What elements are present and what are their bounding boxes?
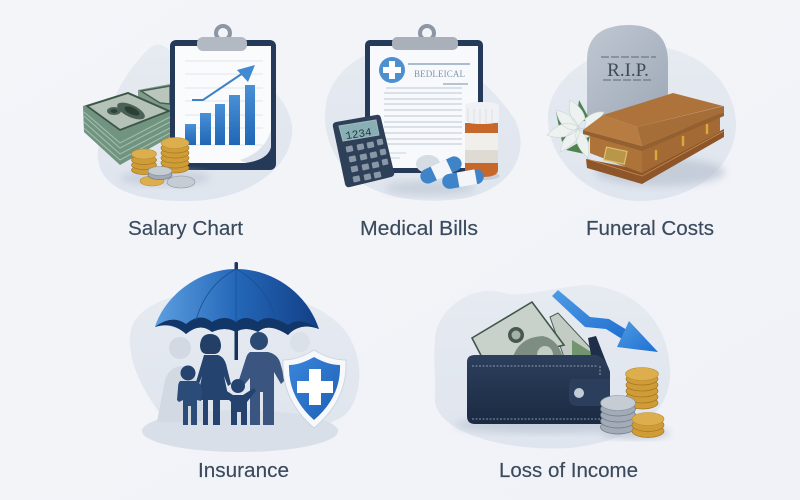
toddler centre	[220, 379, 256, 425]
icon: falling arrow	[552, 290, 658, 352]
letterhead text: BEDLEICAL	[414, 69, 465, 79]
panel: medical bills	[325, 26, 520, 240]
boy left	[177, 366, 202, 425]
panel: loss of income	[434, 285, 670, 482]
icon: medical clipboard	[365, 26, 483, 173]
label: Medical Bills: Medical Bills	[360, 218, 478, 240]
pale background figures	[157, 332, 310, 422]
icon: shield with cross	[283, 350, 346, 428]
label: Insurance: Insurance	[198, 460, 289, 482]
icon: coins	[120, 138, 210, 188]
label: Salary Chart: Salary Chart	[128, 218, 243, 240]
icon: pill bottle	[464, 102, 500, 180]
icon: umbrella	[155, 262, 319, 360]
growth arrow	[192, 65, 255, 100]
icon: capsules	[385, 154, 485, 195]
handles	[656, 125, 707, 159]
woman	[196, 334, 231, 425]
icon: calculator: 1234	[345, 127, 373, 143]
icon: coffin	[583, 93, 725, 186]
panel: funeral costs	[547, 25, 736, 240]
wallet clasp	[569, 379, 610, 406]
icon: wallet	[455, 336, 635, 433]
icon: clipboard	[170, 26, 276, 170]
backdrop blob	[130, 290, 359, 436]
document lines	[384, 88, 462, 144]
icon: coin stacks	[600, 368, 670, 439]
epitaph: R.I.P.	[607, 60, 649, 81]
icon: stack of banknotes	[83, 84, 170, 165]
brass plaque	[604, 147, 627, 164]
label: Funeral Costs: Funeral Costs	[586, 218, 714, 240]
man	[237, 332, 285, 425]
icon: banknotes in wallet	[472, 302, 597, 365]
panel: salary chart	[83, 26, 292, 240]
backdrop blob	[434, 285, 670, 448]
icon: lilies	[547, 100, 604, 158]
panel: insurance	[130, 262, 359, 482]
icon: family	[177, 332, 285, 425]
salary bar chart	[185, 61, 263, 145]
backdrop blob	[325, 46, 520, 201]
medical logo	[379, 57, 405, 83]
label: Loss of Income: Loss of Income	[499, 460, 638, 482]
backdrop blob	[98, 45, 292, 201]
backdrop blob	[548, 46, 736, 201]
ground ellipse	[142, 410, 338, 452]
icon: headstone	[587, 25, 668, 118]
icon: calculator	[333, 115, 394, 187]
